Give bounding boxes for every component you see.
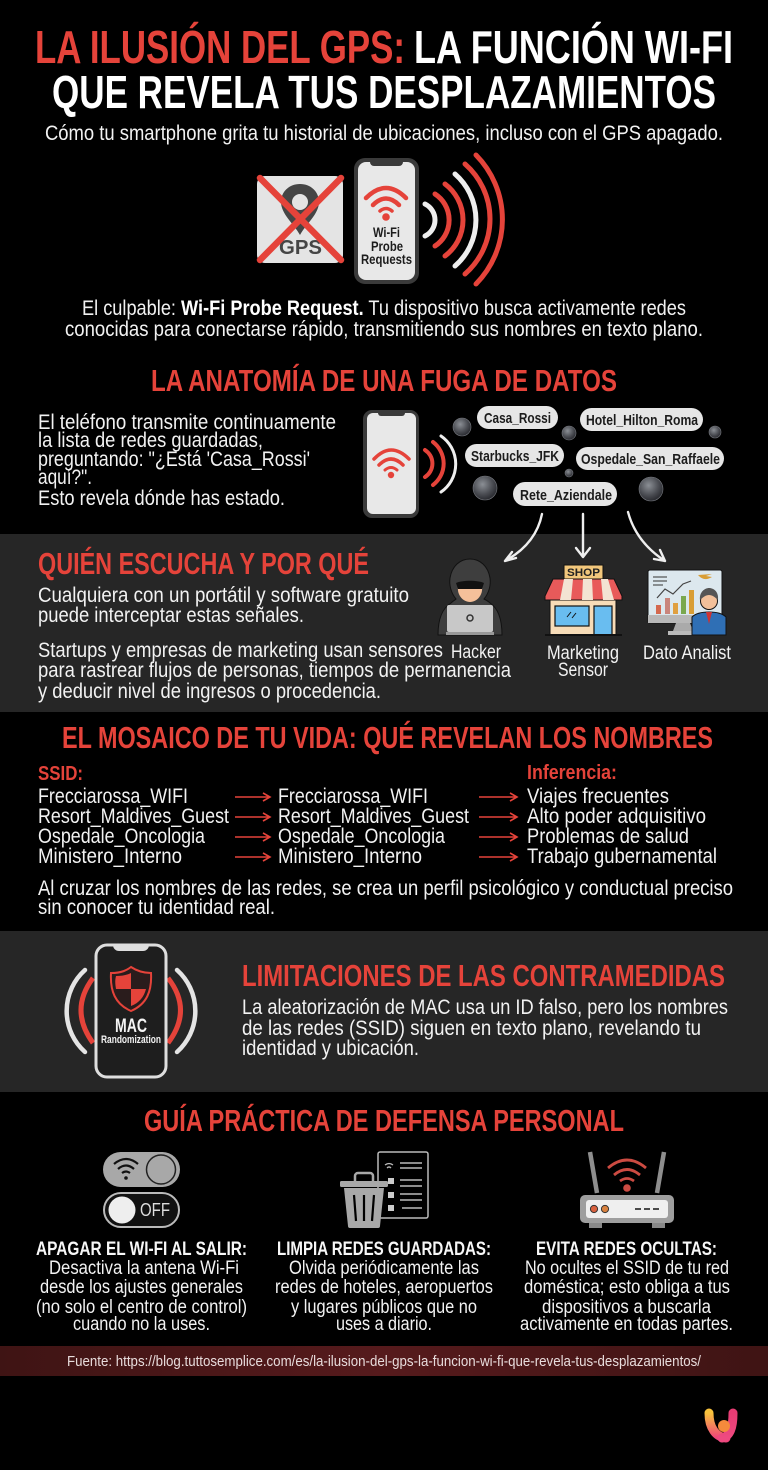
icon: MAC randomization phone: MAC [115, 1016, 147, 1037]
icon: router [580, 1152, 674, 1228]
icon: shop: SHOP [567, 567, 600, 579]
network name pills: Rete_Aziendale [520, 487, 612, 504]
tip: avoid hidden networks: EVITA REDES OCULTAS: [536, 1239, 717, 1260]
text block: anatomy: Esto revela dónde has estado. [38, 487, 285, 510]
labels: audiences: Hacker [451, 642, 502, 663]
icon: trash and saved networks list [340, 1152, 428, 1228]
tip: avoid hidden networks [520, 1239, 733, 1335]
tip: avoid hidden networks: No ocultes el SSID de tu red [525, 1258, 729, 1279]
column headers: Inferencia: [527, 762, 617, 784]
icon: shop [545, 565, 622, 636]
column: SSID repeated: Frecciarossa_WIFI [278, 785, 428, 808]
network name pills [465, 406, 724, 506]
network name pills: Starbucks_JFK [471, 448, 559, 465]
column: SSID: Frecciarossa_WIFI [38, 785, 188, 808]
text block: anatomy: la lista de redes guardadas, [38, 429, 263, 452]
icon: MAC randomization phone [67, 945, 195, 1077]
text block: profile: sin conocer tu identidad real. [38, 896, 275, 919]
tip: avoid hidden networks: dispositivos a buscarla [542, 1297, 711, 1318]
network name pills: Ospedale_San_Raffaele [581, 451, 720, 468]
icon: phone broadcasting [363, 410, 456, 518]
table: SSID inference [38, 762, 717, 868]
tip: turn off Wi-Fi: cuando no la uses. [73, 1314, 210, 1335]
column headers [38, 762, 617, 785]
tip: turn off Wi-Fi [36, 1239, 247, 1335]
logo [709, 1413, 733, 1438]
column headers: SSID: [38, 763, 83, 785]
icon: MAC randomization phone: Randomization [101, 1034, 161, 1046]
panel: limitations [0, 931, 768, 1092]
column: SSID repeated [278, 785, 469, 868]
heading: defense guide: GUÍA PRÁCTICA DE DEFENSA PERSONAL [144, 1103, 624, 1138]
text block: startups: Startups y empresas de marketing usan sensores [38, 639, 443, 662]
heading: anatomy: LA ANATOMÍA DE UNA FUGA DE DATOS [151, 363, 617, 398]
icon: phone with Wi-Fi probe requests: Requests [361, 251, 412, 267]
text block: startups [38, 639, 511, 703]
tip: avoid hidden networks: doméstica; esto obliga a tus [524, 1277, 730, 1298]
icon: GPS crossed out: GPS [279, 237, 322, 259]
labels: audiences [451, 642, 732, 681]
network name pills: Casa_Rossi [484, 410, 551, 427]
text block: anatomy: El teléfono transmite continuamente [38, 411, 336, 434]
icon: phone with Wi-Fi probe requests: Probe [371, 238, 403, 254]
column: inference: Alto poder adquisitivo [527, 805, 706, 828]
labels: audiences: Marketing [547, 643, 619, 664]
text block: limitations [242, 996, 728, 1060]
column: inference [527, 785, 717, 868]
intro text [65, 297, 703, 341]
title [35, 21, 733, 118]
text block: startups: y deducir nivel de ingresos o procedencia. [38, 680, 381, 703]
column: SSID: Ospedale_Oncologia [38, 825, 205, 848]
column: inference: Viajes frecuentes [527, 785, 669, 808]
column: inference: Trabajo gubernamental [527, 845, 717, 868]
heading: who listens: QUIÉN ESCUCHA Y POR QUÉ [38, 546, 369, 581]
labels: audiences: Dato Analist [643, 643, 732, 664]
icon: Wi-Fi toggles: OFF [140, 1200, 170, 1220]
bubbles [453, 418, 721, 501]
column: SSID repeated: Resort_Maldives_Guest [278, 805, 469, 828]
text block: profile [38, 877, 733, 919]
column: SSID repeated: Ospedale_Oncologia [278, 825, 445, 848]
labels: audiences: Sensor [558, 660, 609, 681]
title: LA ILUSIÓN DEL GPS: [35, 21, 405, 73]
tip: clean saved networks: uses a diario. [336, 1314, 432, 1335]
text block: anyone can intercept: puede interceptar estas señales. [38, 604, 304, 627]
text block: anatomy: preguntando: "¿Está 'Casa_Rossi' [38, 448, 310, 471]
text block: limitations: de las redes (SSID) siguen en texto plano, revelando tu [242, 1017, 701, 1040]
tip: clean saved networks: redes de hoteles, aeropuertos [275, 1277, 493, 1298]
column: SSID repeated: Ministero_Interno [278, 845, 422, 868]
icon: GPS crossed out [257, 176, 343, 263]
tip: avoid hidden networks: activamente en todas partes. [520, 1314, 733, 1335]
icon: data analyst [648, 570, 726, 635]
column: SSID: Resort_Maldives_Guest [38, 805, 229, 828]
tip: clean saved networks: LIMPIA REDES GUARDADAS: [277, 1239, 491, 1260]
text block: anatomy [38, 411, 336, 510]
icon: signal waves [425, 155, 502, 284]
column: inference: Problemas de salud [527, 825, 689, 848]
tip: clean saved networks: Olvida periódicamente las [289, 1258, 479, 1279]
text block: anatomy: aquí?". [38, 466, 92, 489]
hero illustration [257, 155, 502, 284]
intro text: El culpable: Wi-Fi Probe Request. Tu dispositivo busca activamente redes [82, 297, 686, 320]
text block: limitations: identidad y ubicación. [242, 1037, 419, 1060]
source footer: Fuente: https://blog.tuttosemplice.com/es/la-ilusion-del-gps-la-funcion-wi-fi-que-revela-tus-desplazamientos/ [67, 1353, 702, 1370]
text block: startups: para rastrear flujos de personas, tiempos de permanencia [38, 659, 511, 682]
source footer [0, 1346, 768, 1376]
panel: who listens [0, 534, 768, 712]
tip: turn off Wi-Fi: APAGAR EL WI-FI AL SALIR: [36, 1239, 247, 1260]
tip: turn off Wi-Fi: Desactiva la antena Wi-Fi [49, 1258, 239, 1279]
intro text: conocidas para conectarse rápido, transmitiendo sus nombres en texto plano. [65, 318, 703, 341]
icon: phone with Wi-Fi probe requests [354, 158, 419, 284]
tip: turn off Wi-Fi: (no solo el centro de control) [36, 1297, 247, 1318]
icon: hacker [438, 559, 502, 635]
text block: anyone can intercept: Cualquiera con un portátil y software gratuito [38, 584, 409, 607]
column: SSID [38, 785, 229, 868]
tip: clean saved networks [275, 1239, 493, 1335]
tip: turn off Wi-Fi: desde los ajustes generales [40, 1277, 243, 1298]
icon: phone with Wi-Fi probe requests: Wi-Fi [373, 224, 400, 240]
network name pills: Hotel_Hilton_Roma [586, 412, 699, 429]
arrows: table rows [235, 793, 517, 861]
tip: clean saved networks: y lugares públicos que no [291, 1297, 477, 1318]
column: SSID: Ministero_Interno [38, 845, 182, 868]
arrows: to audiences [505, 512, 665, 561]
icon: Wi-Fi toggles [103, 1152, 180, 1227]
text block: anyone can intercept [38, 584, 409, 627]
